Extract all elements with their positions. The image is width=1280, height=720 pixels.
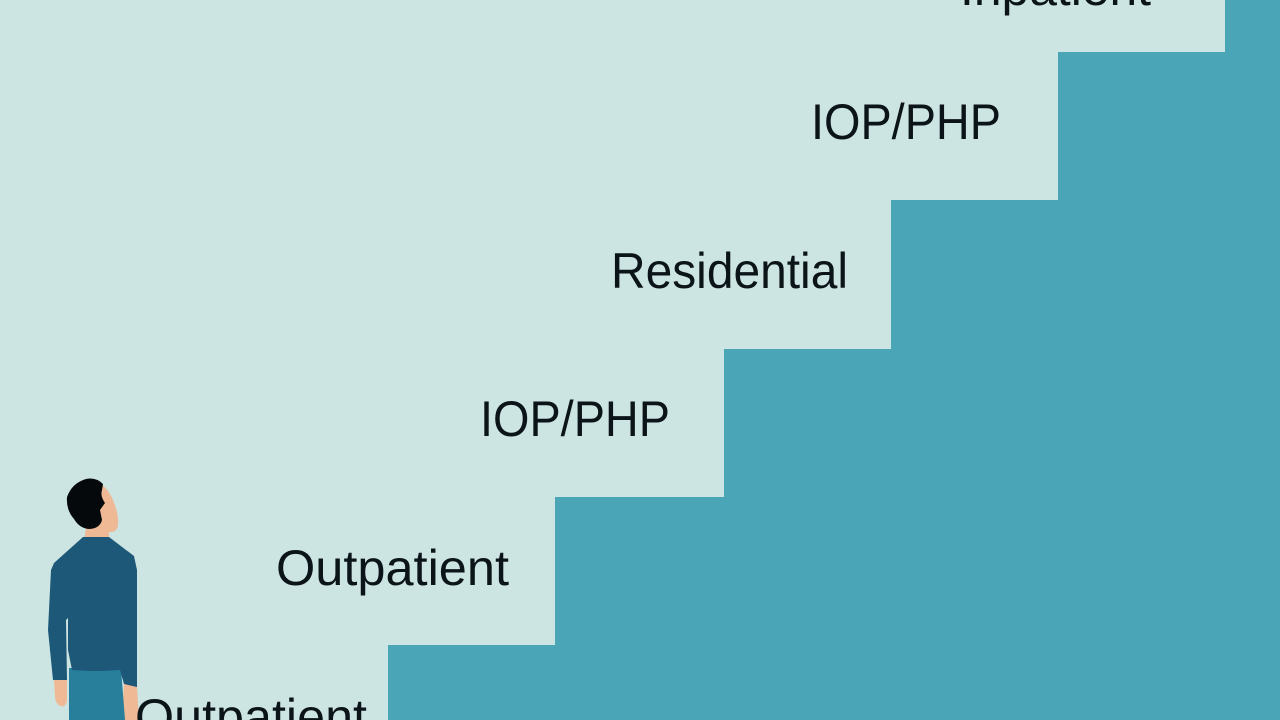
sweater xyxy=(48,537,137,687)
staircase xyxy=(388,0,1280,720)
right hand xyxy=(122,683,139,720)
person looking up the stairs xyxy=(48,479,139,720)
trousers xyxy=(69,668,125,720)
neck and face xyxy=(84,484,118,540)
step label: IOP/PHP lower: IOP/PHP xyxy=(480,391,670,447)
hair xyxy=(67,479,105,529)
left hand xyxy=(54,680,67,706)
step label: Outpatient upper: Outpatient xyxy=(276,540,509,596)
step label: Residential: Residential xyxy=(611,243,848,299)
step label: IOP/PHP upper: IOP/PHP xyxy=(811,94,1001,150)
